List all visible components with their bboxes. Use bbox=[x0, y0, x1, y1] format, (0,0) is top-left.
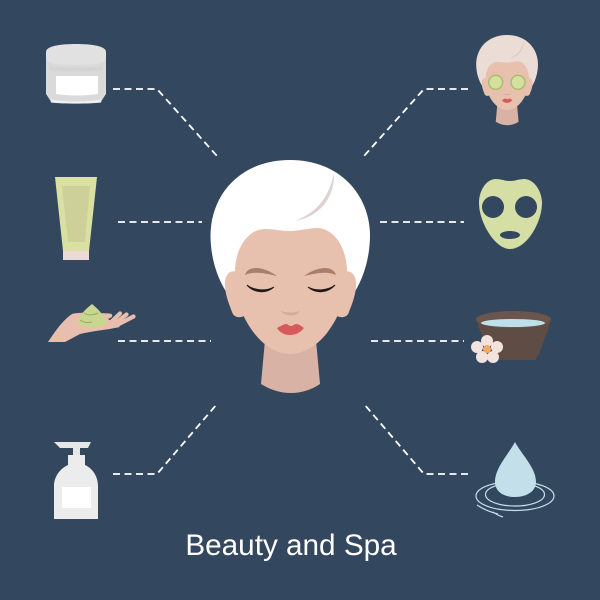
icon: pump bottle bbox=[54, 442, 98, 519]
hair strand bbox=[295, 173, 334, 221]
cucumber slices bbox=[489, 75, 525, 89]
right eyebrow bbox=[304, 268, 336, 276]
neck bbox=[261, 340, 320, 393]
left eyebrow bbox=[245, 268, 277, 276]
icon: face mask bbox=[479, 179, 542, 249]
central face bbox=[210, 160, 370, 393]
icon: woman with cucumber slices bbox=[476, 35, 538, 125]
left ear bbox=[225, 271, 250, 317]
mini head bbox=[476, 35, 538, 125]
nose bbox=[281, 311, 300, 316]
icon: hand with cream bbox=[48, 304, 134, 342]
right ear bbox=[331, 271, 356, 317]
icon: spa bowl with flower bbox=[471, 311, 551, 363]
right closed eye bbox=[308, 285, 335, 292]
icon: cream tube bbox=[55, 177, 97, 260]
icon: water drop with ripples bbox=[476, 442, 554, 517]
left closed eye bbox=[247, 285, 274, 292]
lips bbox=[277, 324, 304, 335]
title: Beauty and Spa bbox=[185, 529, 397, 562]
icon: cream jar bbox=[46, 44, 106, 104]
flower bbox=[471, 335, 503, 363]
hair bbox=[210, 160, 370, 296]
face shape bbox=[235, 228, 347, 354]
